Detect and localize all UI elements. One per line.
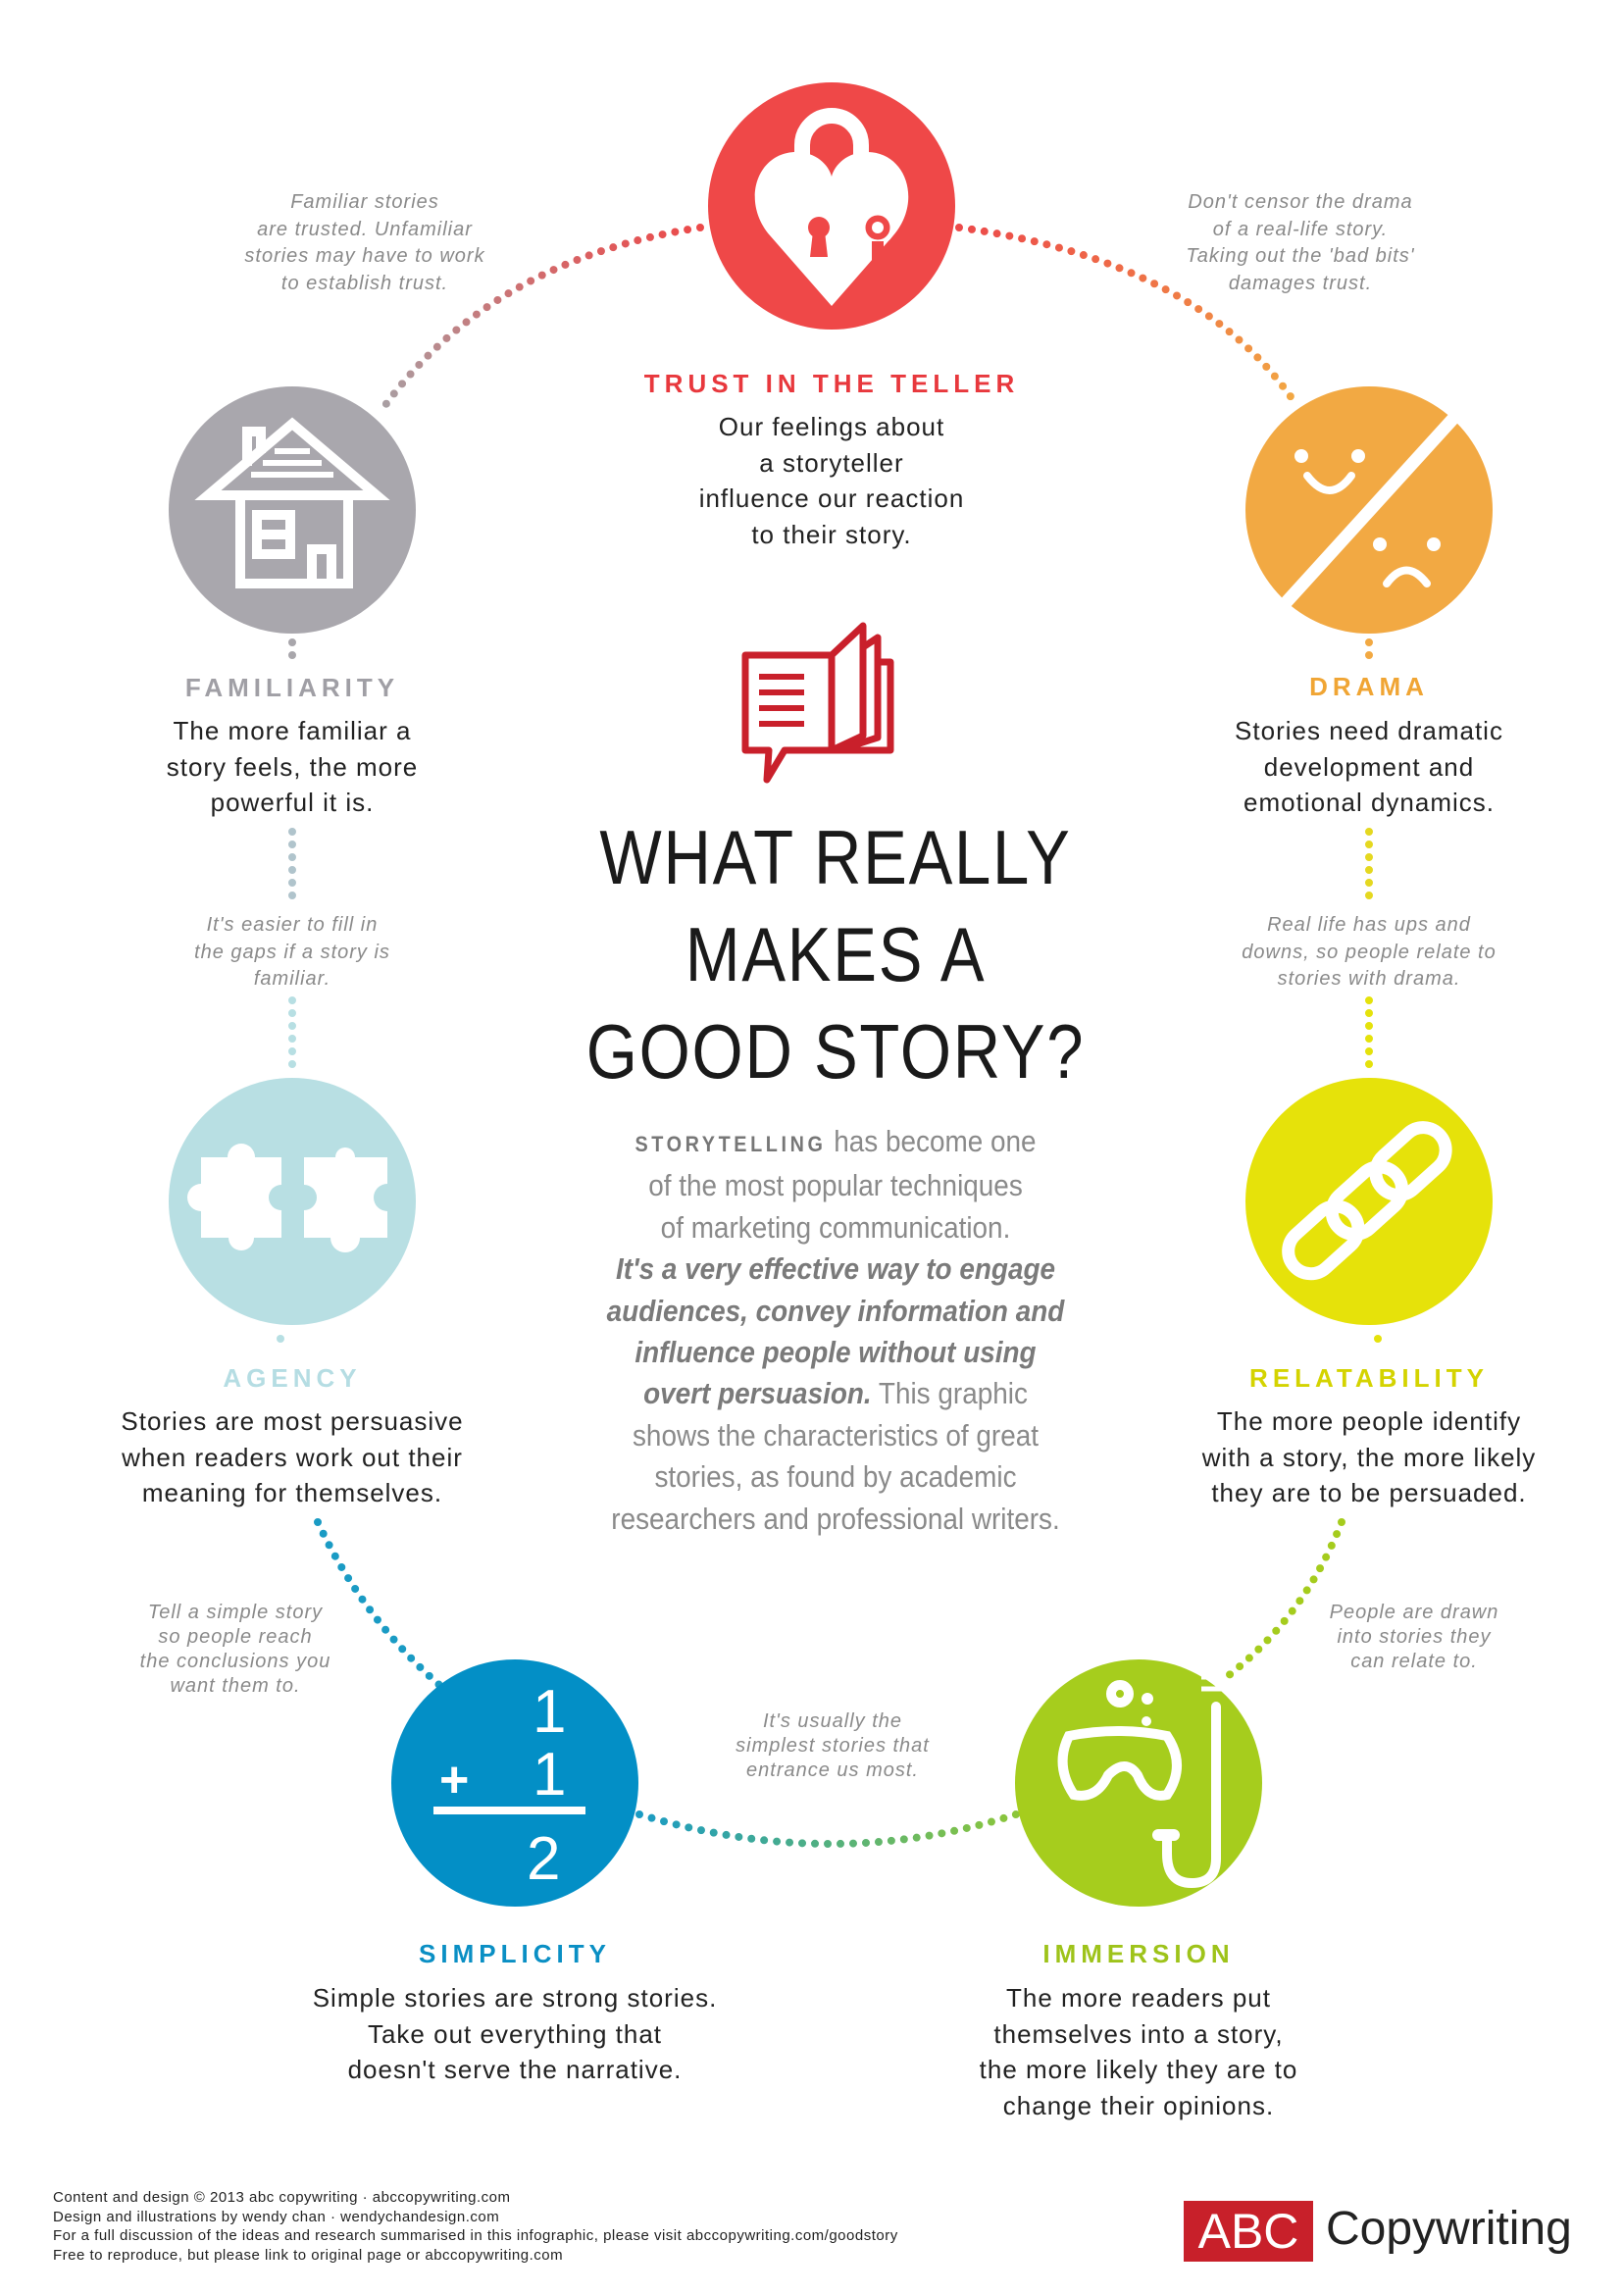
footer credits: Content and design © 2013 abc copywriting · abccopywriting.com [53, 2189, 510, 2206]
title: MAKES A [685, 911, 986, 997]
text: drama body [1235, 716, 1503, 817]
note: don't censor: Don't censor the drama [1188, 191, 1413, 213]
text: trust body [699, 412, 964, 549]
text: simplicity body: Take out everything that [368, 2018, 662, 2048]
text: trust body: influence our reaction [699, 484, 964, 513]
note: familiar stories: to establish trust. [281, 273, 448, 294]
footer credits: Free to reproduce, but please link to original page or abccopywriting.com [53, 2246, 563, 2264]
note: don't censor: of a real-life story. [1213, 218, 1388, 239]
icon: book speech bubble [745, 626, 890, 780]
note: people are drawn: into stories they [1337, 1626, 1492, 1648]
title [586, 814, 1085, 1095]
text: familiarity body: powerful it is. [211, 788, 374, 817]
text: intro paragraph: stories, as found by academic [654, 1459, 1017, 1494]
text: intro paragraph: STORYTELLING has become one [634, 1124, 1037, 1158]
note: don't censor: damages trust. [1229, 273, 1372, 294]
note: people are drawn: can relate to. [1350, 1651, 1478, 1672]
heading: relatability: RELATABILITY [1249, 1363, 1489, 1393]
heading: trust in the teller: TRUST IN THE TELLER [644, 369, 1019, 398]
note: usually simplest: simplest stories that [736, 1735, 930, 1757]
icon: simplicity sum: 1 [533, 1678, 566, 1746]
note: don't censor: Taking out the 'bad bits' [1186, 245, 1415, 267]
note: real life: downs, so people relate to [1242, 942, 1497, 963]
text: drama body: emotional dynamics. [1243, 788, 1495, 817]
note: tell a simple story: so people reach [158, 1626, 313, 1648]
footer credits [53, 2189, 898, 2264]
note: easier to fill: It's easier to fill in [207, 914, 378, 936]
text: intro paragraph: overt persuasion. This graphic [643, 1376, 1028, 1410]
icon: simplicity sum: 1 [533, 1741, 566, 1809]
heading: simplicity: SIMPLICITY [419, 1939, 611, 1968]
text: intro paragraph: shows the characteristics of great [633, 1418, 1039, 1453]
icon: drama faces [1245, 386, 1493, 634]
icon: agency puzzle [169, 1078, 416, 1325]
text: intro paragraph [606, 1124, 1065, 1536]
note: familiar stories: are trusted. Unfamiliar [257, 218, 473, 239]
logo: ABC Copywriting: ABC [1198, 2204, 1298, 2259]
icon: simplicity sum: + [439, 1752, 469, 1809]
text: simplicity body [313, 1983, 717, 2084]
note: tell a simple story: the conclusions you [140, 1651, 330, 1672]
note: easier to fill: familiar. [254, 968, 330, 990]
note: real life: Real life has ups and [1267, 914, 1471, 936]
icon: simplicity sum: 2 [527, 1825, 560, 1893]
note: easier to fill [194, 914, 390, 990]
note: tell a simple story [140, 1602, 330, 1697]
text: familiarity body: story feels, the more [167, 751, 418, 781]
text: intro paragraph: It's a very effective way to engage [616, 1251, 1055, 1286]
icon: simplicity sum [391, 1659, 638, 1907]
text: relatability body: they are to be persuaded. [1211, 1478, 1527, 1507]
icon: relatability chain [1245, 1078, 1493, 1325]
footer credits: Design and illustrations by wendy chan · wendychandesign.com [53, 2209, 499, 2224]
note: usually simplest [736, 1710, 930, 1781]
text: agency body: meaning for themselves. [142, 1478, 442, 1507]
text: immersion body: the more likely they are to [980, 2055, 1297, 2084]
text: immersion body: themselves into a story, [993, 2018, 1284, 2048]
heading: familiarity: FAMILIARITY [185, 673, 399, 702]
text: relatability body [1202, 1406, 1536, 1507]
icon: immersion snorkel mask [1015, 1659, 1262, 1907]
text: intro paragraph: audiences, convey information and [607, 1294, 1064, 1328]
text: simplicity body: Simple stories are strong stories. [313, 1983, 717, 2013]
text: familiarity body: The more familiar a [174, 716, 411, 745]
title: GOOD STORY? [586, 1008, 1085, 1095]
text: drama body: Stories need dramatic [1235, 716, 1503, 745]
note: familiar stories [244, 191, 485, 294]
note: tell a simple story: Tell a simple story [148, 1602, 323, 1623]
text: immersion body [980, 1983, 1297, 2120]
note: usually simplest: entrance us most. [746, 1759, 919, 1781]
note: usually simplest: It's usually the [763, 1710, 902, 1732]
text: relatability body: The more people identify [1217, 1406, 1521, 1436]
logo: ABC Copywriting: Copywriting [1326, 2203, 1572, 2255]
text: agency body: Stories are most persuasive [121, 1406, 464, 1436]
text: immersion body: change their opinions. [1003, 2091, 1274, 2120]
text: relatability body: with a story, the more likely [1202, 1442, 1536, 1471]
text: intro paragraph: of marketing communication. [661, 1210, 1010, 1245]
note: familiar stories: Familiar stories [290, 191, 439, 213]
text: familiarity body [167, 716, 418, 817]
text: trust body: Our feelings about [719, 412, 944, 441]
note: people are drawn: People are drawn [1330, 1602, 1498, 1623]
note: tell a simple story: want them to. [170, 1675, 301, 1697]
note: real life [1242, 914, 1497, 990]
text: immersion body: The more readers put [1006, 1983, 1271, 2013]
icon: trust lock heart [708, 82, 955, 330]
logo: ABC Copywriting [1184, 2201, 1572, 2262]
heading: drama: DRAMA [1309, 672, 1429, 701]
note: real life: stories with drama. [1278, 968, 1460, 990]
note: people are drawn [1330, 1602, 1498, 1672]
text: intro paragraph: researchers and professional writers. [611, 1502, 1060, 1536]
heading: agency: AGENCY [223, 1363, 362, 1393]
text: intro paragraph: of the most popular techniques [648, 1168, 1023, 1202]
heading: immersion: IMMERSION [1042, 1939, 1235, 1968]
text: drama body: development and [1264, 751, 1474, 781]
note: don't censor [1186, 191, 1415, 294]
icon: familiarity house [169, 386, 416, 634]
text: intro paragraph: influence people without using [634, 1335, 1037, 1369]
note: familiar stories: stories may have to work [244, 245, 485, 267]
text: trust body: a storyteller [759, 447, 904, 477]
note: easier to fill: the gaps if a story is [194, 942, 390, 963]
text: simplicity body: doesn't serve the narrative. [348, 2055, 682, 2084]
title: WHAT REALLY [599, 814, 1072, 900]
text: agency body: when readers work out their [122, 1442, 463, 1471]
footer credits: For a full discussion of the ideas and research summarised in this infographic, please visit abccopywriting.com/goodstory [53, 2227, 898, 2244]
text: agency body [121, 1406, 464, 1507]
text: trust body: to their story. [751, 520, 912, 549]
